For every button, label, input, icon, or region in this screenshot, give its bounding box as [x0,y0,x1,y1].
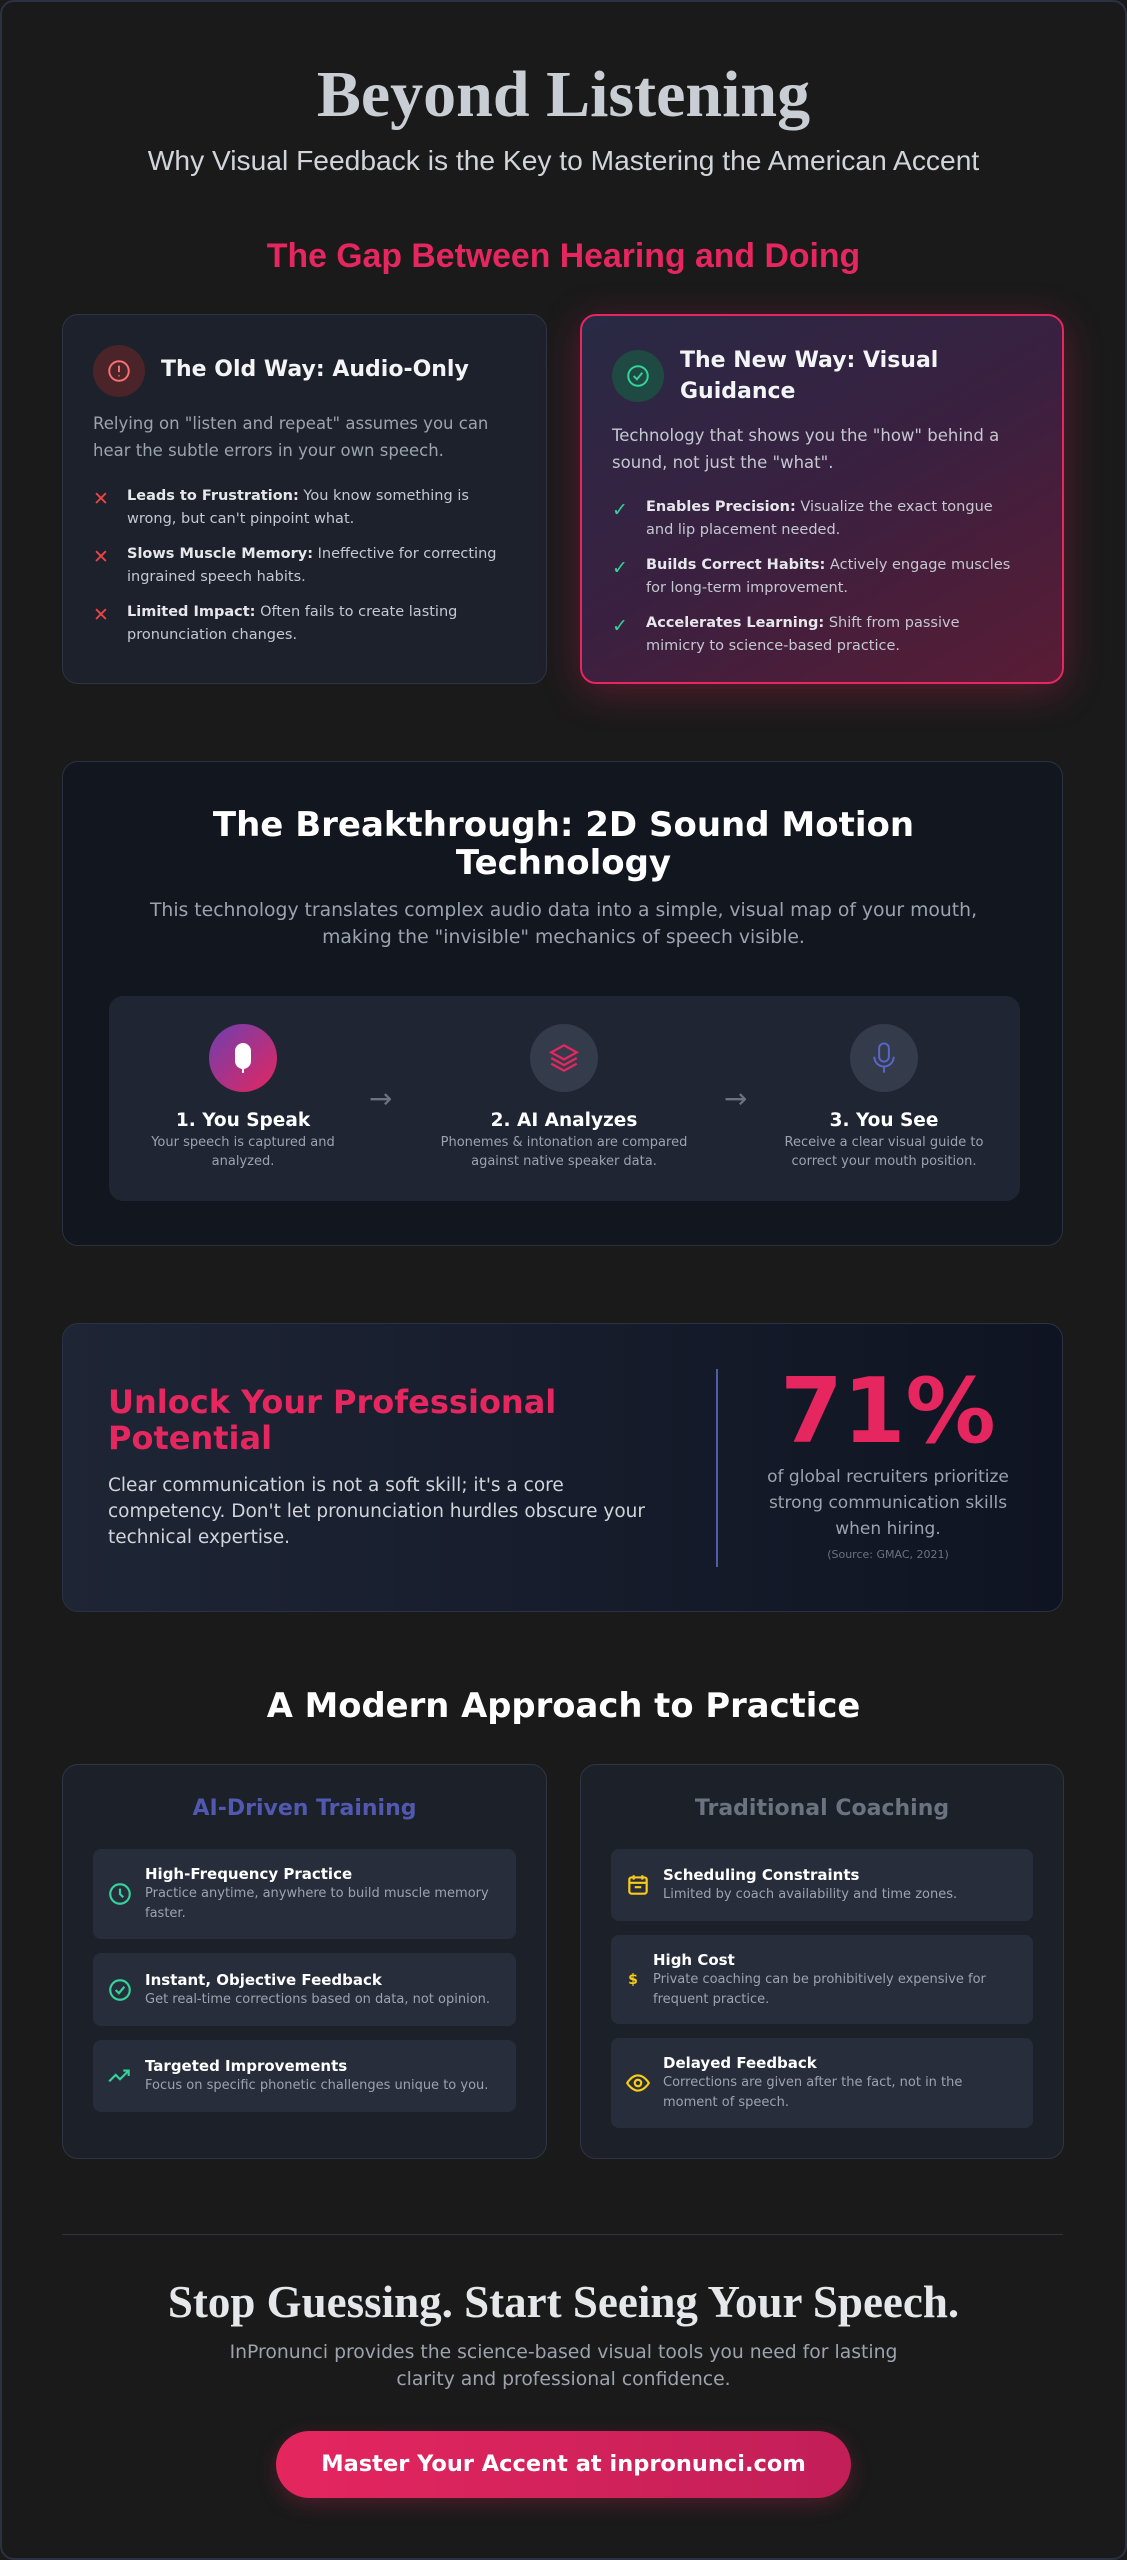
panel: new way [580,314,1064,684]
closing text [230,2342,897,2390]
card title: The New Way: Visual [680,348,938,373]
heading [213,805,914,883]
description [150,900,977,948]
list: drawbacks [93,488,496,643]
item: delayed [611,2038,1033,2128]
step 1: analyzed. [212,1154,274,1169]
item: instant feedback: Get real-time corrections based on data, not opinion. [145,1992,490,2006]
intro text: Technology that shows you the "how" behind a sound, not just the "what". [612,426,999,472]
description: This technology translates complex audio data into a simple, visual map of your mouth, [150,900,977,921]
heading: modern approach: A Modern Approach to Practice [267,1686,860,1725]
stat: strong communication skills [769,1493,1007,1513]
list: drawbacks: Leads to Frustration: You know something is wrong, but can't pinpoint what. [127,488,469,527]
card title [680,348,938,404]
item: cost: Private coaching can be prohibitively expensive for frequent practice. [653,1972,986,2006]
heading: Potential [108,1419,272,1457]
list: drawbacks: Slows Muscle Memory: Ineffective for correcting ingrained speech habits. [127,546,496,585]
CTA button [276,2431,851,2498]
item: targeted [93,2040,516,2112]
item: targeted: Focus on specific phonetic challenges unique to you. [145,2078,488,2093]
icon: check [612,350,664,402]
list: benefits: Builds Correct Habits: Actively engage muscles for long-term improvement. [646,557,1010,596]
list: benefits: ✓ [612,557,628,579]
list: benefits: ✓ [612,615,628,637]
closing text: clarity and professional confidence. [396,2369,731,2390]
item: targeted: Targeted Improvements [145,2057,347,2075]
heading: gap: The Gap Between Hearing and Doing [267,237,860,275]
item: cost: High Cost [653,1950,735,1968]
panel: breakthrough [62,761,1063,1246]
item: high frequency: Practice anytime, anywhere to build muscle memory faster. [145,1886,489,1921]
arrow: → [724,1082,747,1115]
subtitle: Why Visual Feedback is the Key to Mastering the American Accent [148,144,979,176]
closing heading: Stop Guessing. Start Seeing Your Speech. [168,2277,959,2327]
card title: AI-Driven Training [192,1796,417,1821]
list: benefits: Enables Precision: Visualize the exact tongue and lip placement needed. [646,499,993,538]
list: drawbacks: Limited Impact: Often fails to create lasting pronunciation changes. [127,604,457,643]
arrow: → [369,1082,392,1115]
title: Beyond Listening [317,58,810,131]
step 3: 3. You See [830,1110,938,1131]
stat [767,1359,1009,1561]
step 1: Your speech is captured and [151,1135,335,1150]
panel: professional potential [62,1323,1063,1612]
item: scheduling: Limited by coach availability and time zones. [663,1887,957,1902]
list: drawbacks: ✕ [93,604,109,626]
intro text: Relying on "listen and repeat" assumes you can hear the subtle errors in your own speech. [93,414,488,460]
step 3 [785,1024,983,1169]
heading: The Breakthrough: 2D Sound Motion [213,805,914,845]
item: high frequency: High-Frequency Practice [145,1865,352,1883]
item: instant feedback [93,1953,516,2026]
list: benefits: Accelerates Learning: Shift from passive mimicry to science-based practice. [646,615,960,654]
heading [108,1383,556,1457]
divider [716,1369,718,1567]
card title: The Old Way: Audio-Only [161,357,469,382]
list: drawbacks: ✕ [93,488,109,510]
panel: traditional coaching [580,1764,1064,2159]
step 2: against native speaker data. [471,1154,657,1169]
item: delayed: Corrections are given after the fact, not in the moment of speech. [663,2075,962,2110]
item: high frequency [93,1849,516,1939]
step 1 [151,1024,335,1169]
heading: Unlock Your Professional [108,1383,556,1421]
item: cost: $ [628,1972,638,1988]
stat: when hiring. [835,1519,941,1539]
stat: (Source: GMAC, 2021) [827,1548,949,1561]
stat: 71% [780,1359,996,1464]
item: delayed: Delayed Feedback [663,2054,817,2072]
closing text: InPronunci provides the science-based visual tools you need for lasting [230,2342,897,2363]
card title: Guidance [680,379,795,404]
heading: Technology [456,843,671,883]
step 1: 1. You Speak [176,1110,310,1131]
item: cost [611,1935,1033,2024]
CTA button: Master Your Accent at inpronunci.com [321,2451,806,2477]
body text: Clear communication is not a soft skill; it's a core competency. Don't let pronunciation hurdles obscure your technical expertise. [108,1475,645,1548]
step 3: correct your mouth position. [792,1154,976,1169]
panel: old way [62,314,547,684]
step 2: 2. AI Analyzes [491,1110,637,1131]
description: making the "invisible" mechanics of speech visible. [322,927,805,948]
step 3: Receive a clear visual guide to [785,1135,983,1150]
process steps [109,996,1020,1201]
list: benefits: ✓ [612,499,628,521]
item: scheduling [611,1849,1033,1921]
item: scheduling: Scheduling Constraints [663,1866,859,1884]
step 2: Phonemes & intonation are compared [441,1135,687,1150]
step 2 [441,1024,687,1169]
stat: of global recruiters prioritize [767,1467,1009,1487]
list: drawbacks: ✕ [93,546,109,568]
list: benefits [612,499,1010,654]
item: instant feedback: Instant, Objective Feedback [145,1970,382,1988]
panel: AI-driven training [62,1764,547,2159]
icon: warning [93,345,145,397]
card title: Traditional Coaching [695,1796,949,1821]
